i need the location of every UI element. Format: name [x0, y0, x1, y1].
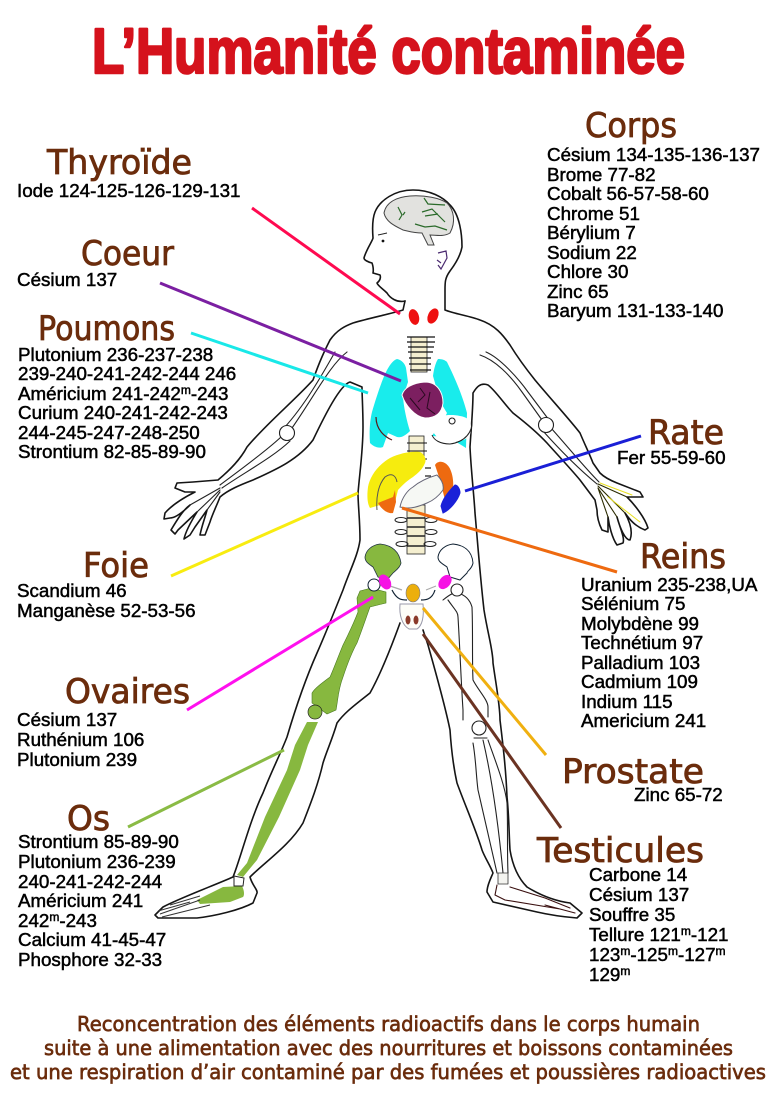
heart — [402, 382, 443, 418]
list: testicles elements: m — [668, 944, 678, 958]
list: testicles elements: m — [620, 964, 630, 978]
pointer: spleen — [465, 436, 641, 491]
hand details — [190, 483, 640, 522]
list: testicles elements: 129 — [589, 964, 620, 985]
list: kidneys elements: Palladium 103 — [581, 652, 700, 673]
heading: liver: Foie — [83, 546, 149, 586]
list: kidneys elements: Sélénium 75 — [581, 593, 685, 614]
pointer: bones — [128, 750, 284, 827]
liver — [367, 452, 425, 510]
list: testicles elements: Césium 137 — [589, 884, 689, 905]
human body figure — [155, 190, 648, 918]
list: bones elements: Plutonium 236-239 — [18, 851, 176, 872]
list: ovaries elements: Ruthénium 106 — [17, 729, 144, 750]
stomach outline — [432, 418, 472, 444]
panel: lungs — [18, 309, 236, 462]
heading: testicles: Testicules — [536, 831, 704, 871]
panel: heart — [17, 234, 174, 290]
left hip joint — [368, 579, 380, 591]
list: kidneys elements: Technétium 97 — [581, 632, 703, 653]
footer text: suite à une alimentation avec des nourritures et boissons contaminées — [44, 1036, 733, 1060]
footer text: Reconcentration des éléments radioactifs dans le corps humain — [77, 1012, 700, 1036]
list: testicles elements — [589, 864, 728, 985]
list: lungs elements: Curium 240-241-242-243 — [18, 402, 228, 423]
list: corps elements: Césium 134-135-136-137 — [547, 144, 760, 165]
left kidney — [378, 490, 396, 513]
pointer: kidneys — [402, 508, 617, 572]
list: kidneys elements: Americium 241 — [581, 710, 706, 731]
heading: prostate: Prostate — [562, 752, 704, 792]
list: testicles elements: 123 — [589, 944, 620, 965]
heading: thyroid: Thyroïde — [46, 143, 192, 183]
panel: testicles — [536, 831, 728, 985]
testicles — [400, 604, 423, 629]
list: bones elements: 240-241-242-244 — [18, 871, 162, 892]
list: corps elements: Baryum 131-133-140 — [547, 300, 723, 321]
footer text — [10, 1012, 766, 1084]
prostate — [406, 584, 420, 602]
list: thyroid elements: Iode 124-125-126-129-131 — [17, 180, 240, 201]
panel: corps — [547, 106, 760, 321]
pointer: prostate — [423, 608, 546, 755]
list: bones elements: Calcium 41-45-47 — [18, 929, 166, 950]
list: bones elements: Américium 241 — [18, 890, 143, 911]
list: bones elements: Strontium 85-89-90 — [18, 831, 179, 852]
stomach — [430, 413, 471, 442]
list: bones elements — [18, 831, 179, 970]
green knee — [308, 705, 322, 719]
list: ovaries elements — [17, 709, 144, 770]
list: testicles elements: m — [681, 924, 691, 938]
arm bones — [220, 352, 599, 488]
pointer: lungs — [191, 333, 368, 393]
list: testicles elements: -127 — [678, 944, 716, 965]
list: lungs elements: -243 — [191, 383, 228, 404]
liver outline — [377, 475, 397, 510]
list: ovaries elements: Césium 137 — [17, 709, 117, 730]
ovaries — [376, 572, 454, 592]
list: corps elements — [547, 144, 760, 321]
footer text: et une respiration d’air contaminé par des fumées et poussières radioactives — [10, 1060, 766, 1084]
panel: bones — [18, 799, 179, 970]
list: corps elements: Bérylium 7 — [547, 222, 636, 243]
panel: kidneys — [581, 537, 758, 731]
panel: liver — [17, 546, 196, 621]
list: lungs elements: Plutonium 236-237-238 — [18, 344, 213, 365]
list: heart elements: Césium 137 — [17, 269, 117, 290]
pointer: liver — [171, 493, 358, 576]
list: lungs elements: Strontium 82-85-89-90 — [18, 441, 206, 462]
lung outline — [376, 417, 392, 440]
green tibia — [237, 722, 318, 877]
pancreas — [400, 475, 443, 508]
heading: ovaries: Ovaires — [65, 672, 190, 712]
panel: thyroid — [17, 143, 240, 201]
list: corps elements: Chrome 51 — [547, 203, 640, 224]
list: bones elements: -243 — [59, 910, 97, 931]
list: kidneys elements: Uranium 235-238,UA — [581, 574, 758, 595]
pointer: ovaries — [187, 597, 373, 710]
list: testicles elements: -125 — [630, 944, 668, 965]
heading: corps: Corps — [585, 106, 677, 146]
list: kidneys elements: Cadmium 109 — [581, 671, 698, 692]
list: testicles elements: Carbone 14 — [589, 864, 687, 885]
list: testicles elements: m — [716, 944, 726, 958]
list: lungs elements: Américium 241-242 — [18, 383, 181, 404]
pointer: testicles — [423, 634, 561, 828]
pointer: thyroid — [252, 208, 400, 314]
panel: ovaries — [17, 672, 190, 770]
spine — [395, 337, 437, 554]
list: corps elements: Brome 77-82 — [547, 164, 656, 185]
brain — [384, 196, 454, 245]
list: kidneys elements: Indium 115 — [581, 691, 673, 712]
list: lungs elements: m — [181, 383, 191, 397]
list: liver elements: Scandium 46 — [17, 580, 127, 601]
list: kidneys elements — [581, 574, 758, 731]
list: bones elements: 242 — [18, 910, 49, 931]
list: corps elements: Zinc 65 — [547, 281, 609, 302]
list: corps elements: Cobalt 56-57-58-60 — [547, 183, 709, 204]
list: testicles elements: Tellure 121 — [589, 924, 681, 945]
right leg bones — [443, 584, 575, 913]
list: testicles elements: -121 — [691, 924, 728, 945]
lungs — [370, 359, 467, 448]
list: lungs elements: 239-240-241-242-244 246 — [18, 363, 236, 384]
list: corps elements: Chlore 30 — [547, 261, 628, 282]
list: kidneys elements: Molybdène 99 — [581, 613, 699, 634]
panel: prostate — [562, 752, 723, 805]
panel: spleen — [617, 413, 726, 468]
heading: kidneys: Reins — [640, 537, 726, 577]
spleen — [441, 485, 460, 513]
list: lungs elements — [18, 344, 236, 462]
list: liver elements — [17, 580, 196, 621]
list: liver elements: Manganèse 52-53-56 — [17, 600, 196, 621]
pointer: heart — [160, 283, 401, 381]
list: bones elements: Phosphore 32-33 — [18, 949, 162, 970]
body outline — [155, 190, 648, 918]
green foot — [158, 876, 244, 917]
eye and ear — [378, 233, 447, 269]
list: lungs elements: 244-245-247-248-250 — [18, 422, 200, 443]
list: corps elements: Sodium 22 — [547, 242, 637, 263]
thyroid — [407, 307, 441, 326]
list: bones elements: m — [49, 910, 59, 924]
right kidney — [435, 462, 453, 500]
green femur — [312, 588, 386, 714]
list: ovaries elements: Plutonium 239 — [17, 749, 137, 770]
list: testicles elements: m — [620, 944, 630, 958]
list: prostate elements: Zinc 65-72 — [634, 784, 723, 805]
heading: heart: Coeur — [81, 234, 174, 274]
heading: bones: Os — [67, 799, 110, 839]
heading: spleen: Rate — [648, 413, 724, 453]
list: spleen elements: Fer 55-59-60 — [617, 447, 726, 468]
pelvis — [365, 544, 473, 600]
heading: lungs: Poumons — [38, 309, 175, 349]
list: testicles elements: Souffre 35 — [589, 904, 675, 925]
heart veins — [410, 388, 435, 414]
